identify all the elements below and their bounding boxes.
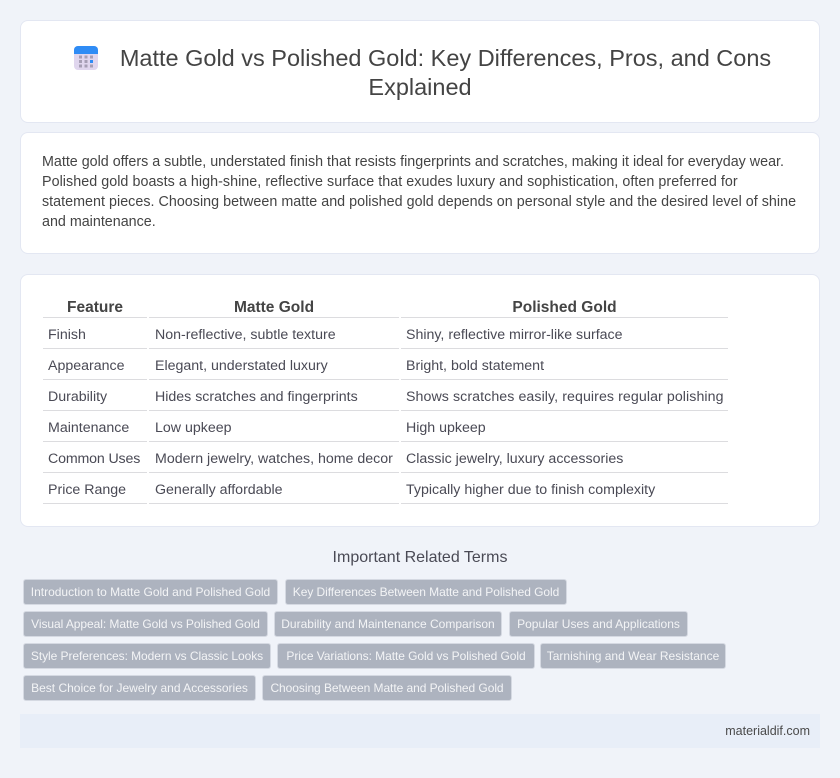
heading: Important Related Terms: Important Related Terms — [333, 549, 507, 566]
tags: related terms: Style Preferences: Modern vs Classic Looks — [31, 649, 263, 663]
tags: related terms: Choosing Between Matte and Polished Gold — [270, 681, 504, 695]
tags: related terms: Price Variations: Matte Gold vs Polished Gold — [286, 649, 526, 663]
title — [120, 45, 771, 100]
panel: comparison table: Non-reflective, subtle texture — [155, 327, 336, 343]
title: Explained — [368, 74, 472, 100]
tags: related terms: Key Differences Between Matte and Polished Gold — [293, 585, 559, 599]
panel: comparison table: High upkeep — [406, 420, 486, 436]
panel: comparison table: Shiny, reflective mirror-like surface — [406, 327, 623, 343]
panel: comparison table: Typically higher due to finish complexity — [406, 482, 655, 498]
footer: site name: materialdif.com — [725, 724, 810, 738]
table header: Matte Gold: Matte Gold — [234, 299, 314, 316]
row: Durability: Durability — [48, 389, 107, 405]
description text — [42, 154, 796, 230]
description text: and maintenance. — [42, 214, 156, 230]
panel: comparison table: Hides scratches and fingerprints — [155, 389, 358, 405]
panel: description — [20, 132, 820, 254]
panel: comparison table: Shows scratches easily, requires regular polishing — [406, 389, 724, 405]
panel: comparison table: Low upkeep — [155, 420, 232, 436]
row: Appearance: Appearance — [48, 358, 125, 374]
title: Matte Gold vs Polished Gold: Key Differences, Pros, and Cons — [120, 45, 771, 71]
table header: Polished Gold: Polished Gold — [512, 299, 617, 316]
tags: related terms: Visual Appeal: Matte Gold vs Polished Gold — [31, 617, 260, 631]
tags: related terms: Durability and Maintenance Comparison — [281, 617, 495, 631]
tags: related terms: Tarnishing and Wear Resistance — [547, 649, 719, 663]
tags: related terms: Popular Uses and Applications — [517, 617, 680, 631]
tags: related terms: Introduction to Matte Gold and Polished Gold — [31, 585, 270, 599]
description text: Matte gold offers a subtle, understated finish that resists fingerprints and scratches, making it ideal for everyday wear. — [42, 154, 784, 170]
tags: related terms: Best Choice for Jewelry and Accessories — [31, 681, 248, 695]
header panel — [20, 20, 820, 123]
footer bar — [20, 714, 820, 748]
description text: statement pieces. Choosing between matte and polished gold depends on personal style and the desired level of shine — [42, 194, 796, 210]
row: Maintenance: Maintenance — [48, 420, 129, 436]
panel: comparison table: Elegant, understated luxury — [155, 358, 328, 374]
icon: calendar — [74, 46, 98, 70]
row: Finish: Finish — [48, 327, 86, 343]
panel: comparison table: Bright, bold statement — [406, 358, 544, 374]
panel: comparison table: Generally affordable — [155, 482, 283, 498]
description text: Polished gold boasts a high-shine, reflective surface that exudes luxury and sophistication, often preferred for — [42, 174, 738, 190]
panel: comparison table: Classic jewelry, luxury accessories — [406, 451, 623, 467]
tags: related terms — [23, 579, 726, 701]
row: Common Uses: Common Uses — [48, 451, 140, 467]
table header: Feature: Feature — [67, 299, 123, 316]
panel: comparison table — [20, 274, 820, 527]
row: Price Range: Price Range — [48, 482, 126, 498]
panel: comparison table: Modern jewelry, watches, home decor — [155, 451, 393, 467]
